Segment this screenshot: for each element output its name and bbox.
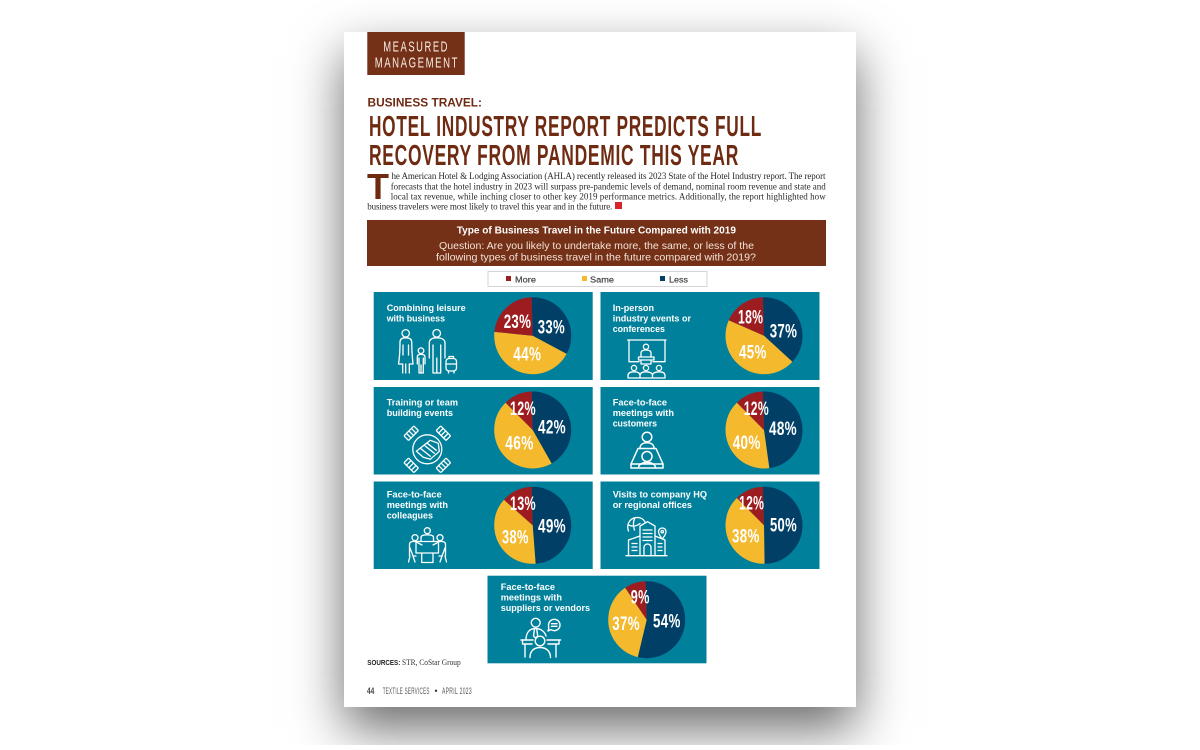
label: In-person: [613, 302, 654, 313]
pie: 12 more, 40 same, 48 less: 12%: [744, 398, 769, 420]
icon: two people across a table: [631, 432, 663, 468]
sources note: [367, 658, 461, 667]
label: Face-to-face: [387, 489, 442, 500]
pie: 12 more, 38 same, 50 less: [732, 492, 797, 548]
pie: 12 more, 46 same, 42 less: 12%: [510, 398, 536, 420]
label: [613, 397, 674, 428]
title: [369, 111, 762, 172]
intro paragraph with drop cap: business travelers were most likely to travel this year and in the future.: [367, 202, 612, 212]
panel: face-to-face meetings with colleagues: [374, 482, 593, 569]
pie: 23 more, 44 same, 33 less: 23%: [504, 311, 531, 333]
pie: 18 more, 45 same, 37 less: 18%: [738, 306, 763, 328]
label: [386, 302, 466, 324]
label: meetings with: [387, 499, 448, 510]
page footer: TEXTILE SERVICES: [383, 686, 430, 696]
page footer: 44: [367, 686, 374, 696]
label: [387, 397, 458, 418]
pie: 9 more, 37 same, 54 less: [612, 586, 681, 639]
label: meetings with: [613, 407, 674, 418]
pie: 23 more, 44 same, 33 less: [504, 311, 565, 366]
pie: 12 more, 38 same, 50 less: 12%: [739, 492, 764, 514]
panel: visits to company HQ: [600, 482, 820, 569]
icon: office building with globe and pin: [626, 517, 667, 556]
chart header band: Type of Business Travel in the Future Compared with 2019: [457, 226, 736, 236]
pie: 12 more, 46 same, 42 less: 46%: [505, 432, 534, 454]
label: Face-to-face: [613, 397, 667, 408]
pie: 9 more, 37 same, 54 less: 54%: [653, 610, 681, 632]
pie: 13 more, 38 same, 49 less: [502, 493, 566, 548]
sources note: SOURCES:: [367, 658, 400, 667]
pie: 13 more, 38 same, 49 less: 13%: [510, 493, 536, 515]
intro paragraph with drop cap: T: [367, 166, 389, 207]
intro paragraph with drop cap: local tax revenue, while inching closer to other key 2019 performance metrics. Additionally, the report highlighted how: [391, 192, 826, 202]
pie: 13 more, 38 same, 49 less: 38%: [502, 526, 529, 548]
pie: 12 more, 40 same, 48 less: 40%: [733, 432, 761, 454]
legend: [488, 272, 707, 286]
pie: 23 more, 44 same, 33 less: 33%: [538, 316, 565, 338]
intro paragraph with drop cap: he American Hotel & Lodging Association (AHLA) recently released its 2023 State of the Hotel Industry report. The report: [392, 171, 826, 181]
label: [613, 302, 691, 334]
pie: 12 more, 38 same, 50 less: 50%: [770, 515, 797, 537]
label: or regional offices: [613, 499, 692, 510]
label: suppliers or vendors: [501, 602, 590, 613]
label: meetings with: [501, 592, 562, 602]
chart header band: [367, 220, 826, 266]
legend: More: [515, 274, 536, 284]
pie: 23 more, 44 same, 33 less: 44%: [513, 344, 541, 366]
section tab: measured management: MEASURED: [383, 39, 449, 56]
pie: 18 more, 45 same, 37 less: 37%: [770, 321, 797, 343]
chart header band: following types of business travel in the future compared with 2019?: [436, 252, 756, 264]
label: Face-to-face: [501, 581, 555, 592]
label: [387, 489, 448, 520]
pie: 12 more, 46 same, 42 less: [505, 398, 566, 454]
label: conferences: [613, 323, 665, 334]
icon: family with suitcase: [398, 330, 456, 373]
kicker: business travel: BUSINESS TRAVEL:: [368, 97, 482, 110]
panel: combining leisure with business: [374, 292, 593, 380]
label: colleagues: [387, 509, 433, 520]
intro paragraph with drop cap: [367, 166, 826, 212]
panel: training or team building: [374, 387, 593, 474]
panel: in-person industry events: [600, 292, 820, 380]
label: building events: [387, 407, 453, 418]
legend: Less: [669, 274, 688, 284]
intro paragraph with drop cap: forecasts that the hotel industry in 2023 will surpass pre-pandemic levels of demand, nominal room revenue and state and: [391, 182, 826, 192]
section tab: measured management: MANAGEMENT: [375, 55, 459, 72]
pie: 12 more, 40 same, 48 less: [733, 398, 797, 454]
label: industry events or: [613, 312, 691, 324]
panel: face-to-face meetings with suppliers: [488, 576, 706, 663]
label: customers: [613, 417, 657, 428]
label: Training or team: [387, 397, 458, 408]
icon: joined hands: [404, 426, 451, 473]
icon: colleagues around a table: [408, 528, 446, 562]
label: [613, 489, 707, 510]
pie: 12 more, 46 same, 42 less: 42%: [538, 417, 566, 439]
pie: 18 more, 45 same, 37 less: [738, 306, 797, 363]
chart header band: Question: Are you likely to undertake more, the same, or less of the: [439, 241, 754, 252]
label: Combining leisure: [387, 302, 466, 313]
icon: conference presenter and audience: [628, 340, 666, 378]
pie: 12 more, 40 same, 48 less: 48%: [769, 418, 797, 440]
label: [501, 581, 590, 613]
pie: 18 more, 45 same, 37 less: 45%: [739, 341, 767, 363]
legend: Same: [590, 274, 614, 284]
label: with business: [386, 312, 445, 324]
section tab: measured management: [367, 32, 465, 75]
title: RECOVERY FROM PANDEMIC THIS YEAR: [369, 140, 739, 172]
panel: face-to-face meetings with customers: [600, 387, 820, 474]
pie: 12 more, 38 same, 50 less: 38%: [732, 526, 760, 548]
icon: desk meeting with speech bubble: [521, 618, 560, 658]
page footer: APRIL 2023: [442, 686, 472, 696]
title: HOTEL INDUSTRY REPORT PREDICTS FULL: [369, 111, 762, 143]
label: Visits to company HQ: [613, 489, 707, 500]
sources note: STR, CoStar Group: [402, 658, 461, 667]
magazine page sheet: [344, 32, 856, 707]
pie: 9 more, 37 same, 54 less: 37%: [612, 613, 640, 635]
pie: 9 more, 37 same, 54 less: 9%: [631, 586, 650, 608]
pie: 13 more, 38 same, 49 less: 49%: [538, 516, 566, 538]
